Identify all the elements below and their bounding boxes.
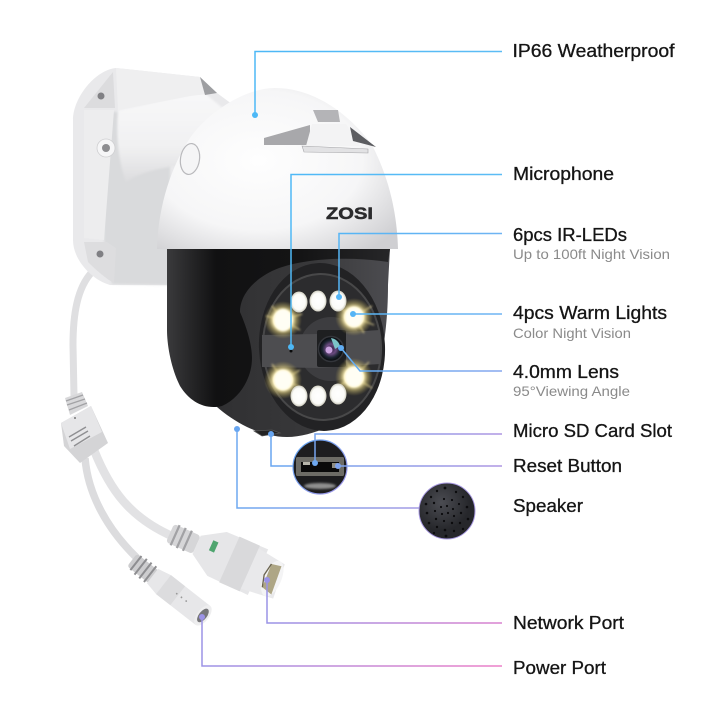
lens [317, 330, 346, 367]
callout: Speaker: Speaker [513, 496, 583, 516]
cable splitter [61, 392, 108, 463]
callout: 4pcs Warm Lights: Color Night Vision [513, 325, 631, 341]
callout: 4.0mm Lens: 4.0mm Lens [513, 362, 619, 382]
power connector [125, 551, 215, 629]
callout: 6pcs IR-LEDs: Up to 100ft Night Vision [513, 246, 670, 262]
cables and connectors [61, 272, 291, 629]
callout: Network Port: Network Port [513, 613, 624, 633]
network connector [160, 510, 291, 605]
callout: IP66 Weatherproof: IP66 Weatherproof [512, 41, 676, 61]
black body [167, 248, 390, 437]
callout: Reset Button: Reset Button [513, 456, 622, 476]
screw holes [96, 92, 115, 258]
callout: Micro SD Card Slot [312, 421, 672, 466]
callout: Network Port [264, 577, 624, 633]
network cable [94, 450, 174, 537]
dome [157, 88, 398, 249]
dome badge [178, 142, 202, 176]
wall bracket [73, 68, 240, 285]
callout: IP66 Weatherproof [252, 41, 676, 118]
inset: SD card slot [293, 440, 347, 494]
dome latch [264, 110, 376, 153]
callout: Microphone: Microphone [513, 164, 614, 184]
callout: 6pcs IR-LEDs: 6pcs IR-LEDs [513, 225, 627, 245]
callout: Speaker [234, 426, 583, 516]
IR LEDs [290, 290, 346, 406]
callout: Micro SD Card Slot: Micro SD Card Slot [513, 421, 672, 441]
sensor band [262, 317, 380, 381]
inset: speaker grille [419, 483, 475, 539]
warm lights [264, 298, 374, 399]
callout: 4.0mm Lens: 95°Viewing Angle [513, 383, 630, 399]
callout: 4.0mm Lens [338, 345, 630, 399]
camera [73, 68, 398, 437]
callout: 6pcs IR-LEDs [336, 225, 670, 300]
callout: 4pcs Warm Lights: 4pcs Warm Lights [513, 303, 667, 323]
lens face [255, 260, 389, 434]
callout: Power Port [199, 614, 606, 678]
logo: ZOSI [326, 205, 373, 223]
power cable [85, 458, 137, 558]
bottom slot [254, 430, 280, 436]
callout: Power Port: Power Port [513, 658, 606, 678]
callout: 4pcs Warm Lights [350, 303, 667, 341]
callout: Microphone [288, 164, 614, 350]
upper cable [73, 272, 92, 396]
left sleeve [167, 249, 390, 407]
callout: Reset Button [268, 431, 622, 476]
